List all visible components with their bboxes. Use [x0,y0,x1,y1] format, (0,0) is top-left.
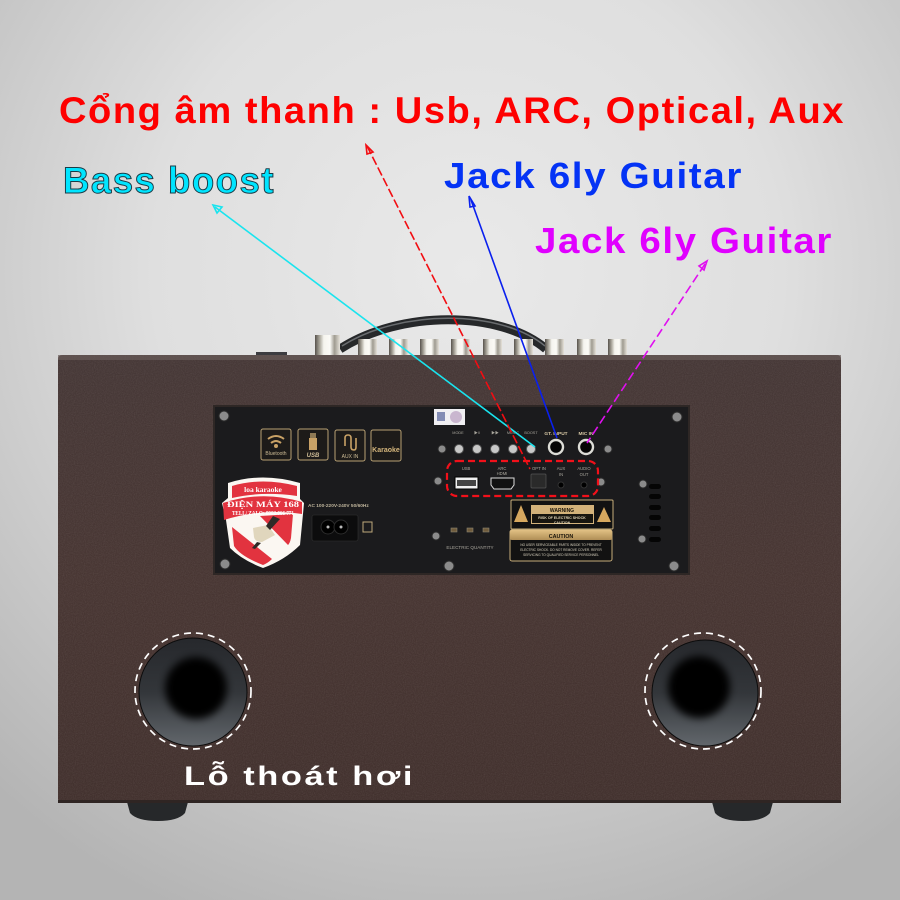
caution sticker sign: ELECTRIC SHOCK. DO NOT REMOVE COVER. REFER [520,548,602,552]
arrow: bass boost [213,205,535,447]
jack inputs [544,431,594,454]
warning sticker sign [511,500,613,529]
control buttons: MUSIC [507,431,519,435]
feature badges [261,429,401,461]
badge captions: USB [307,453,320,459]
battery indicator: ELECTRIC QUANTITY [446,545,494,550]
logo sticker shield [222,478,304,568]
audio ports: OUT [580,472,589,477]
audio ports: USB [462,466,471,471]
control buttons: ▶II [474,430,480,435]
power socket [308,503,372,541]
warning sticker sign: CAUTION [554,521,571,525]
arrow: blue jack [469,196,557,438]
top connectors [256,335,627,357]
badge captions [265,447,400,460]
control buttons: ▶▶ [491,430,499,435]
heading: blue jack: Jack 6ly Guitar [444,155,743,196]
icon: aux cable [345,435,356,450]
audio ports: IN [559,472,563,477]
audio ports: AUDIO [577,466,591,471]
caution sticker sign: NO USER SERVICEABLE PARTS INSIDE TO PREVENT [520,543,602,547]
caution sticker sign: CAUTION [549,534,573,540]
power socket: AC 100-220V-240V 50/60Hz [308,503,369,509]
jack inputs: MIC IN [579,431,594,437]
heading: audio ports: Cổng âm thanh : Usb, ARC, Optical, Aux [59,90,845,131]
jack inputs: GT. INPUT [544,431,568,437]
badge captions: Bluetooth [265,451,287,457]
icon: bluetooth wifi [268,436,284,447]
badge captions: AUX IN [342,454,359,460]
red dashed highlight of audio ports [447,461,598,496]
speaker cabinet [58,355,841,803]
warning sticker sign: WARNING [550,508,574,514]
audio ports: ARC [498,466,506,471]
caution sticker sign [510,530,612,561]
logo sticker shield: ĐIỆN MÁY 168 [227,499,299,509]
logo sticker shield: loa karaoke [244,485,283,494]
battery indicator [446,528,494,550]
control buttons: BOOST [524,431,538,435]
label: bass port: Lỗ thoát hơi [184,760,415,791]
heading: magenta jack: Jack 6ly Guitar [535,220,833,261]
rubber feet [127,802,773,821]
audio ports: HDMI [497,471,507,476]
control buttons: MODE [452,431,464,435]
carry handle [340,318,546,349]
icon: usb stick [309,433,317,450]
audio ports [455,466,591,489]
caution sticker sign: SERVICING TO QUALIFIED SERVICE PERSONNEL [523,553,599,557]
control buttons [452,430,538,454]
arrow: magenta jack [587,261,707,443]
panel screws [219,411,682,571]
audio ports: AUX [557,466,566,471]
right bass port [645,633,761,749]
logo sticker shield: TELL/ ZALO: 0902 066 771 [232,511,294,517]
vent slots [649,484,661,542]
badge captions: Karaoke [372,447,400,454]
heading: bass boost: Bass boost [63,160,275,201]
left bass port [135,633,251,749]
serial sticker [434,409,465,425]
audio ports: OPT IN [532,466,546,471]
arrow: audio ports [366,145,530,469]
back control panel [213,405,690,575]
warning sticker sign: RISK OF ELECTRIC SHOCK [538,516,586,520]
